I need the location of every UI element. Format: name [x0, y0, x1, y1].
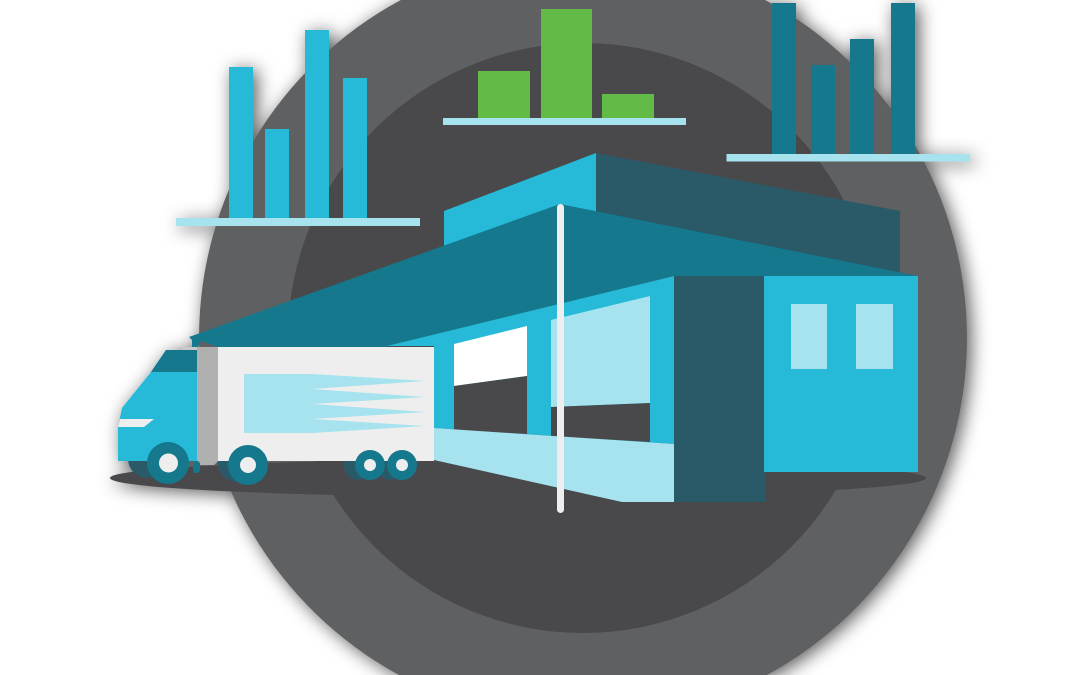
- front wall: [387, 276, 674, 444]
- loading bay 2: [551, 296, 650, 442]
- delivery truck: [118, 347, 434, 485]
- warehouse building: [189, 153, 918, 513]
- middle wheel: [228, 445, 268, 485]
- step tab: [193, 461, 200, 473]
- headlight: [118, 419, 154, 427]
- office block: [764, 276, 918, 472]
- artwork with shared drop shadow: [110, 0, 970, 675]
- office window right: [856, 304, 893, 369]
- ground shadow ellipse: [110, 459, 926, 497]
- dark pillar: [674, 276, 765, 502]
- loading dock floor: [434, 428, 674, 502]
- connector cap: [182, 347, 197, 350]
- bar chart: center green: [443, 9, 686, 125]
- cab window: [151, 350, 197, 372]
- office window left: [791, 304, 827, 369]
- cab: [118, 350, 197, 461]
- bar chart: left cyan: [176, 30, 420, 226]
- front wheel: [147, 442, 189, 484]
- support pole: [557, 204, 564, 513]
- upper roof side face: [596, 153, 900, 280]
- rear wheel two: [387, 450, 417, 480]
- background inner circle: [288, 43, 878, 633]
- bar chart: right teal: [726, 3, 970, 162]
- background outer circle: [199, 0, 967, 675]
- rear wheel one: [355, 450, 385, 480]
- upper roof front face: [444, 153, 596, 260]
- speed graphic on trailer: [244, 374, 425, 433]
- trailer box: [218, 347, 434, 461]
- main roof canopy: [189, 204, 918, 347]
- wheel shadows: [128, 440, 404, 482]
- connector between cab and trailer: [197, 347, 218, 465]
- loading bay 1: [454, 326, 527, 434]
